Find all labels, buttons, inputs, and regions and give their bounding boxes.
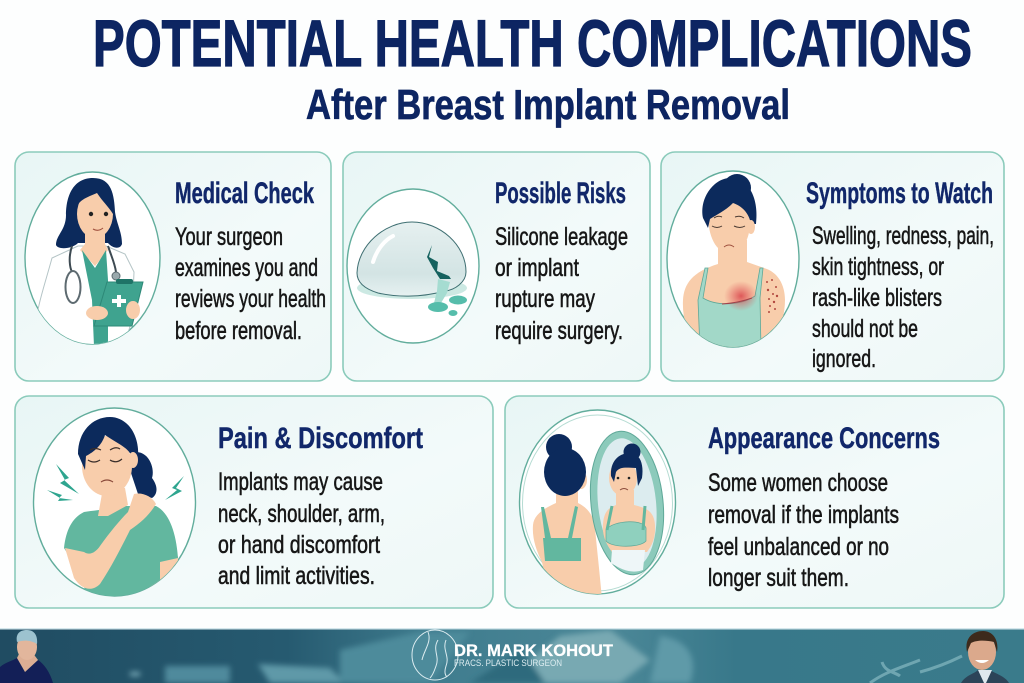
body text: should not be	[812, 315, 918, 343]
body text	[218, 468, 385, 590]
subtitle: After Breast Implant Removal	[306, 81, 790, 128]
icon: doctor with clipboard	[25, 172, 160, 346]
heading: Pain & Discomfort	[218, 422, 423, 455]
body text: and limit activities.	[218, 562, 375, 590]
body text: feel unbalanced or no	[708, 533, 889, 561]
heading: Possible Risks	[495, 177, 626, 210]
body text: Some women choose	[708, 469, 888, 497]
heading: Medical Check	[175, 177, 314, 210]
body text: longer suit them.	[708, 564, 849, 592]
logo tagline: FRACS. PLASTIC SURGEON	[454, 658, 562, 669]
body text: reviews your health	[175, 285, 326, 313]
body text: skin tightness, or	[812, 253, 944, 281]
body text: neck, shoulder, arm,	[218, 500, 385, 528]
panel: medical check	[15, 152, 331, 381]
body text: removal if the implants	[708, 501, 899, 529]
body text: Silicone leakage	[495, 223, 628, 251]
body text	[708, 469, 899, 592]
heading: Appearance Concerns	[708, 422, 940, 455]
logo mark	[412, 630, 458, 680]
body text: or implant	[495, 254, 579, 282]
body text	[812, 222, 994, 373]
body text: Your surgeon	[175, 223, 283, 251]
logo name: DR. MARK KOHOUT	[454, 641, 614, 660]
body text: before removal.	[175, 317, 302, 345]
body text: rash-like blisters	[812, 284, 942, 312]
body text: examines you and	[175, 254, 318, 282]
body text: require surgery.	[495, 317, 623, 345]
panel: possible risks	[343, 152, 650, 381]
body text: Implants may cause	[218, 468, 383, 496]
body text: rupture may	[495, 285, 595, 313]
body text	[175, 223, 326, 345]
panel: appearance concerns	[505, 396, 1004, 608]
body text: ignored.	[812, 345, 876, 373]
footer banner	[0, 628, 1024, 683]
icon: woman at mirror	[520, 410, 676, 600]
icon: woman holding shoulder	[34, 408, 196, 600]
portrait: surgeon in scrubs	[0, 630, 53, 683]
body text	[495, 223, 628, 345]
body text: or hand discomfort	[218, 531, 380, 559]
icon: ruptured implant	[347, 189, 479, 343]
icon: woman with rash	[667, 171, 799, 350]
panel: symptoms to watch	[661, 152, 1004, 381]
panel: pain and discomfort	[15, 396, 493, 608]
portrait: doctor smiling	[961, 631, 1009, 683]
